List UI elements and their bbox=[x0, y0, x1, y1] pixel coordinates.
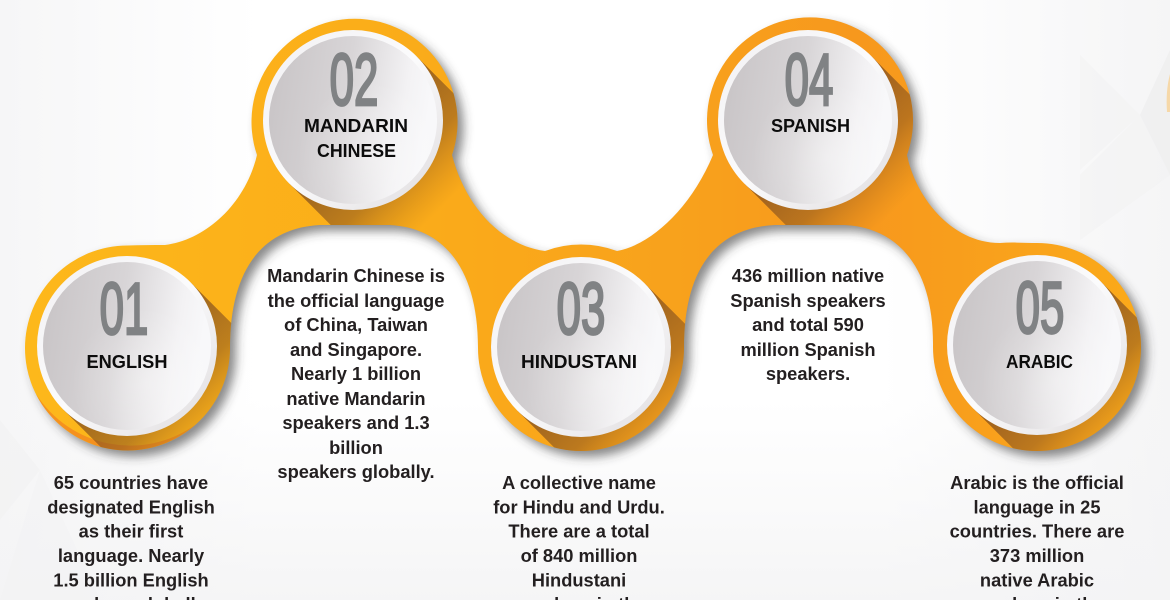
description: Mandarin Chinese: speakers and 1.3 bbox=[282, 412, 430, 433]
node 02 Mandarin Chinese bbox=[263, 30, 443, 210]
label Mandarin Chinese bbox=[304, 115, 408, 161]
description: Arabic: countries. There are bbox=[950, 520, 1124, 542]
node 03 Hindustani bbox=[491, 257, 671, 437]
label Mandarin Chinese: MANDARIN bbox=[304, 115, 408, 136]
small orange accent at right edge bbox=[1167, 74, 1170, 112]
long shadows of discs bbox=[63, 56, 1170, 499]
description: Arabic: native Arabic bbox=[980, 570, 1094, 590]
label Mandarin Chinese: CHINESE bbox=[317, 140, 396, 161]
description: English: 65 countries have bbox=[54, 472, 208, 493]
description: English: 1.5 billion English bbox=[53, 570, 209, 590]
orange connector band bbox=[25, 17, 1141, 451]
description: Spanish: million Spanish bbox=[740, 339, 876, 360]
description: Hindustani: Hindustani bbox=[532, 570, 626, 590]
description: Hindustani: of 840 million bbox=[521, 545, 637, 566]
label Arabic: ARABIC bbox=[1006, 351, 1073, 372]
description: English: designated English bbox=[47, 496, 215, 518]
description: Mandarin Chinese: Nearly 1 billion bbox=[291, 363, 421, 384]
description: Arabic: language in 25 bbox=[974, 496, 1100, 518]
description: Mandarin Chinese: Mandarin Chinese is bbox=[267, 265, 445, 286]
description: Hindustani: A collective name bbox=[502, 472, 656, 493]
description: Spanish: and total 590 bbox=[752, 314, 864, 335]
description: English: language. Nearly bbox=[58, 545, 205, 566]
description: Mandarin Chinese: the official language bbox=[268, 290, 444, 311]
description: Mandarin Chinese: native Mandarin bbox=[286, 388, 426, 409]
label Spanish: SPANISH bbox=[771, 115, 850, 136]
description: Hindustani: There are a total bbox=[508, 520, 650, 542]
connector band shadow bbox=[31, 23, 1147, 457]
description: Arabic: 373 million bbox=[990, 545, 1084, 566]
description: Mandarin Chinese: and Singapore. bbox=[290, 339, 422, 360]
node 01 English bbox=[37, 256, 217, 436]
description: Mandarin Chinese: billion bbox=[329, 437, 383, 458]
node 05 Arabic bbox=[947, 255, 1127, 435]
number 05: 05 bbox=[1016, 268, 1064, 349]
number 03: 03 bbox=[557, 269, 605, 350]
description: Spanish: 436 million native bbox=[732, 265, 884, 286]
description: English: as their first bbox=[79, 520, 183, 542]
description: Spanish: Spanish speakers bbox=[730, 290, 886, 311]
description: Arabic: Arabic is the official bbox=[950, 472, 1124, 493]
label English: ENGLISH bbox=[86, 351, 168, 372]
number 02: 02 bbox=[330, 40, 378, 121]
label Hindustani: HINDUSTANI bbox=[521, 351, 637, 372]
description: Hindustani: for Hindu and Urdu. bbox=[493, 496, 665, 518]
number 04: 04 bbox=[785, 40, 833, 121]
description: Mandarin Chinese: of China, Taiwan bbox=[284, 314, 428, 335]
description: Spanish: speakers. bbox=[766, 363, 850, 384]
description: Mandarin Chinese: speakers globally. bbox=[277, 461, 435, 482]
node 04 Spanish bbox=[718, 30, 898, 210]
number 01: 01 bbox=[100, 269, 148, 350]
